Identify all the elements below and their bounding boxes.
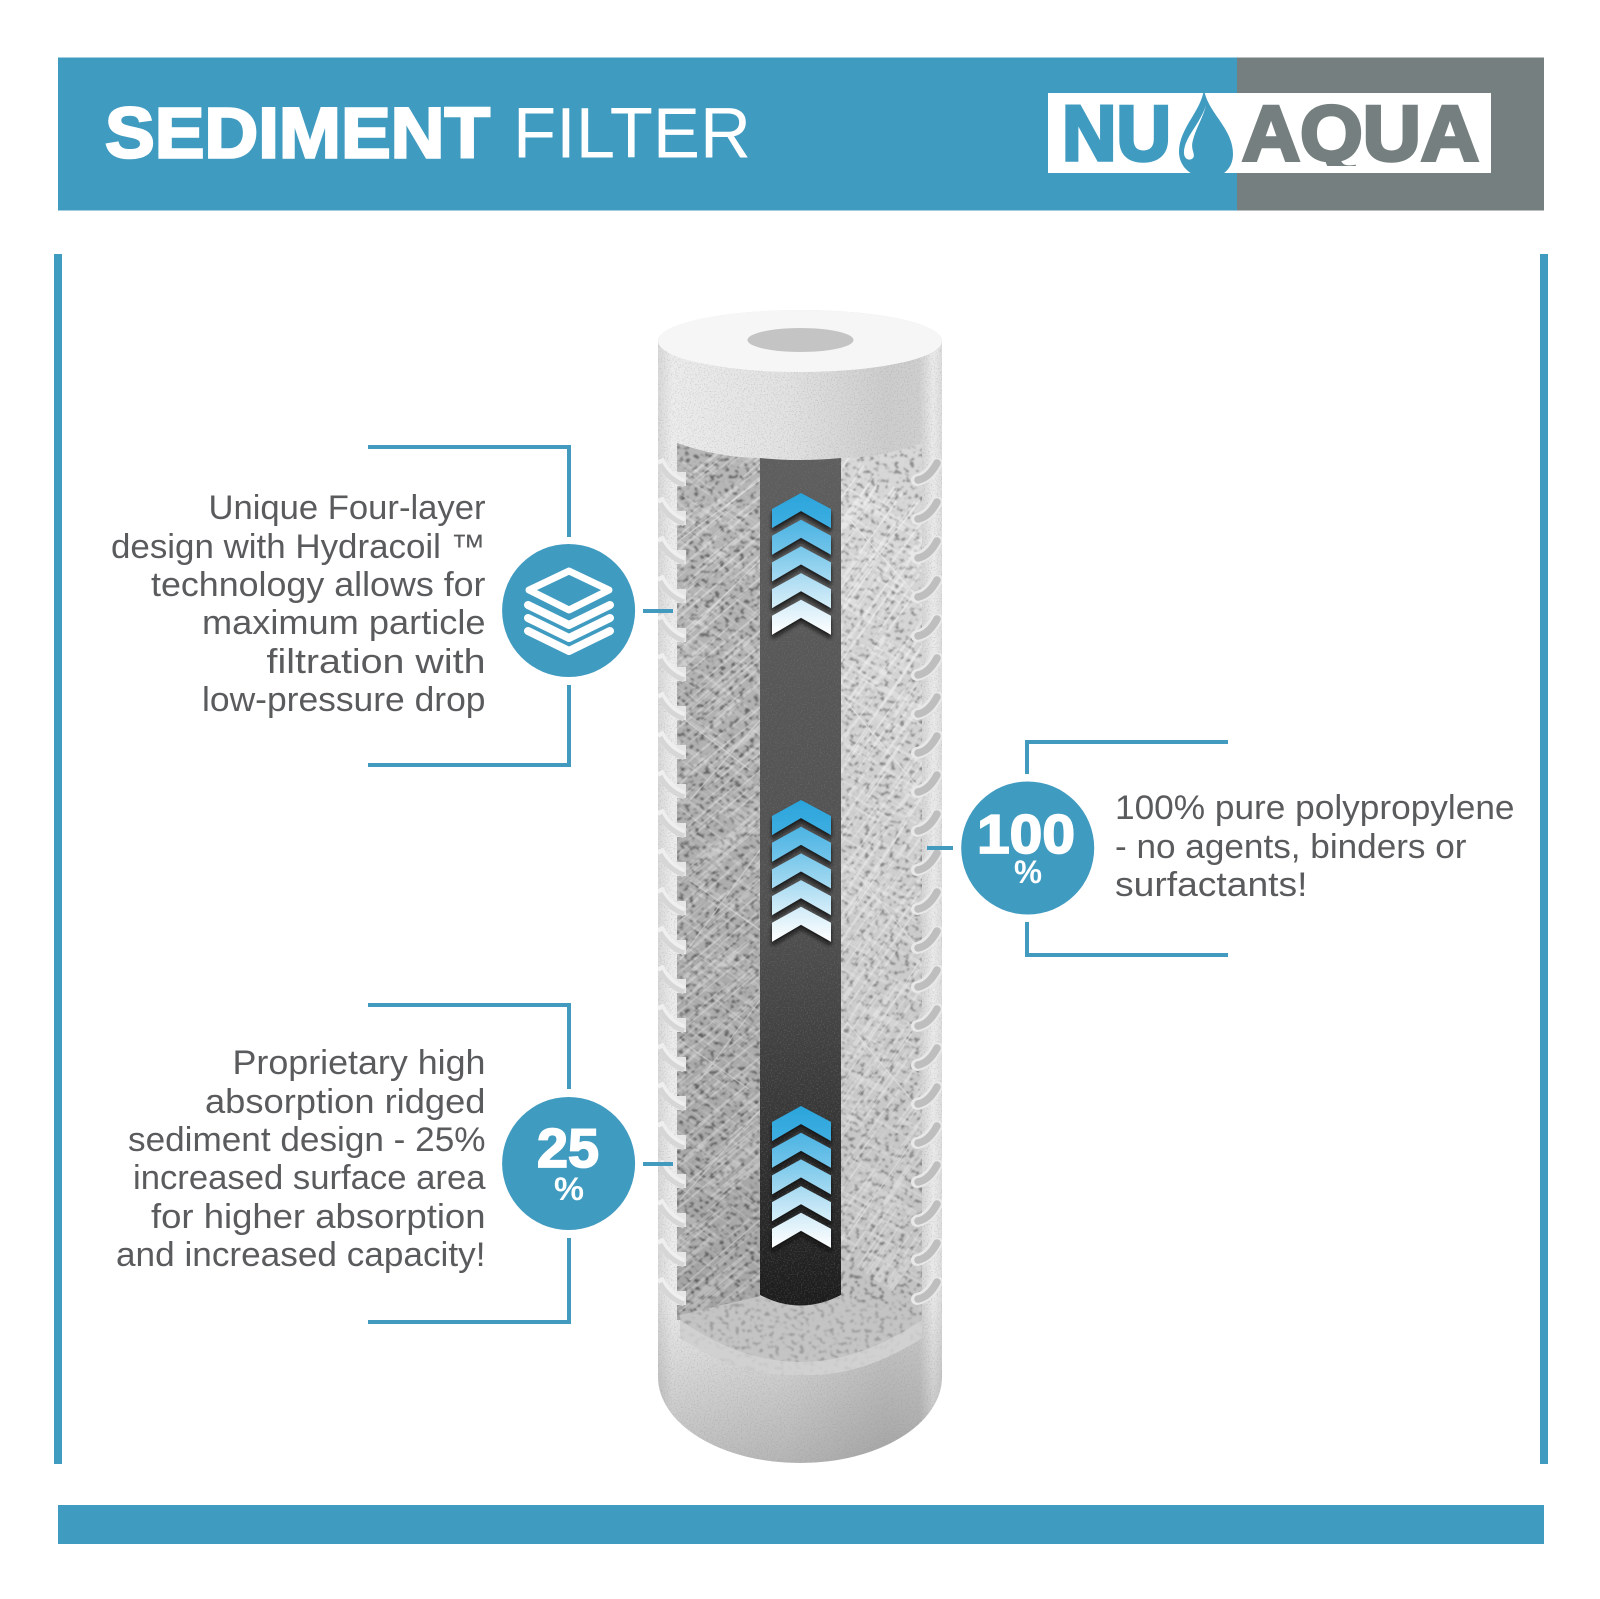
text block: design with Hydracoil ™	[111, 528, 486, 566]
icon: water drop	[1179, 89, 1233, 178]
callout: four-layer design	[111, 447, 673, 765]
side rail right	[1540, 254, 1548, 1464]
text block	[116, 1044, 486, 1274]
footer band	[58, 1505, 1544, 1544]
text block: technology allows for	[151, 566, 486, 604]
left ridges	[658, 458, 690, 1316]
logo: Nu Aqua: AQUA	[1242, 89, 1479, 177]
right media layer	[841, 444, 922, 1316]
text block: surfactants!	[1115, 866, 1308, 904]
logo: Nu Aqua: NU	[1062, 89, 1171, 177]
chevrons: top	[772, 493, 831, 635]
text block: filtration with	[266, 643, 486, 681]
side rail left	[54, 254, 62, 1464]
right ridges	[908, 458, 942, 1316]
centre hole	[748, 328, 854, 352]
text block	[1115, 789, 1514, 904]
chevrons: bottom	[772, 1106, 831, 1248]
filter cartridge illustration	[658, 310, 942, 1463]
text block: Unique Four-layer	[208, 489, 486, 527]
bracket	[1027, 742, 1228, 955]
text block: 100% pure polypropylene	[1115, 789, 1514, 827]
title: FILTER	[513, 94, 751, 174]
badge number: 100	[977, 803, 1075, 865]
text block: and increased capacity!	[116, 1236, 486, 1274]
callout: 100% polypropylene	[927, 742, 1514, 955]
connector	[927, 846, 953, 850]
text block	[111, 489, 486, 719]
text block: for higher absorption	[151, 1198, 486, 1236]
connector	[643, 609, 673, 613]
logo: Nu Aqua	[1048, 89, 1491, 178]
badge percent: %	[554, 1171, 584, 1207]
badge circle	[502, 544, 635, 677]
connector	[643, 1162, 673, 1166]
text block: - no agents, binders or	[1115, 828, 1466, 866]
text block: low-pressure drop	[202, 681, 486, 719]
title: SEDIMENT	[105, 94, 490, 174]
chevrons: middle	[772, 800, 831, 942]
filter foam grain and shading	[658, 341, 942, 1466]
header band	[58, 58, 1544, 210]
badge percent: %	[1014, 854, 1042, 890]
bracket	[368, 447, 569, 765]
badge circle	[961, 782, 1094, 914]
text block: Proprietary high	[232, 1044, 486, 1082]
callout: ridged sediment design	[116, 1005, 673, 1322]
icon: stacked layers	[528, 571, 610, 651]
text block: maximum particle	[202, 604, 486, 642]
bottom plate of media	[680, 1296, 922, 1376]
text block: sediment design - 25%	[128, 1121, 486, 1159]
central core tube	[760, 456, 841, 1316]
top face of filter	[658, 310, 942, 372]
filter body	[658, 310, 942, 1463]
badge circle	[502, 1097, 635, 1230]
text block: increased surface area	[133, 1159, 486, 1197]
badge number: 25	[537, 1117, 599, 1179]
bracket	[368, 1005, 569, 1322]
text block: absorption ridged	[205, 1083, 486, 1121]
left media layer	[677, 443, 760, 1320]
